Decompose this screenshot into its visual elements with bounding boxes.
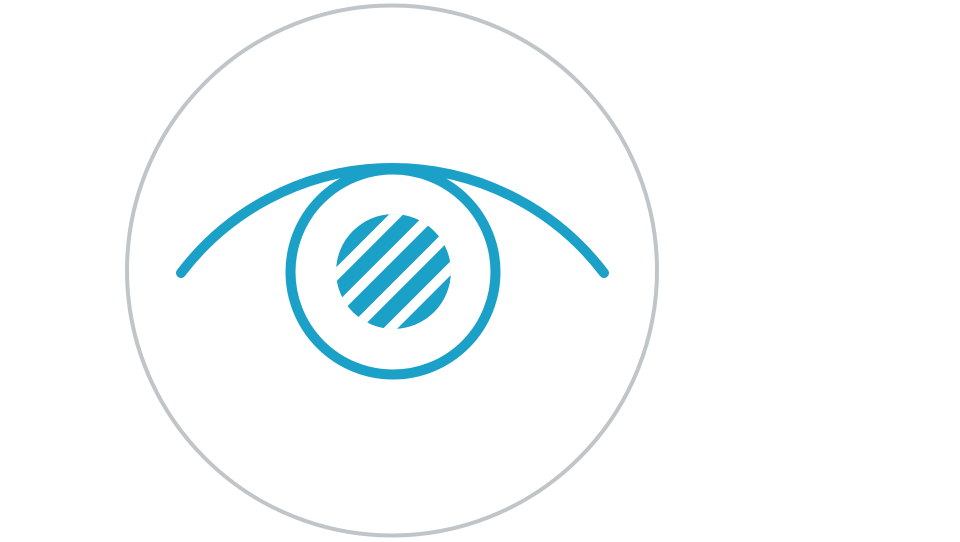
eyelid arc — [181, 168, 604, 273]
outer circle — [127, 6, 657, 536]
pupil striped — [336, 214, 451, 329]
icon: eye — [181, 164, 604, 378]
iris ring — [290, 170, 496, 374]
